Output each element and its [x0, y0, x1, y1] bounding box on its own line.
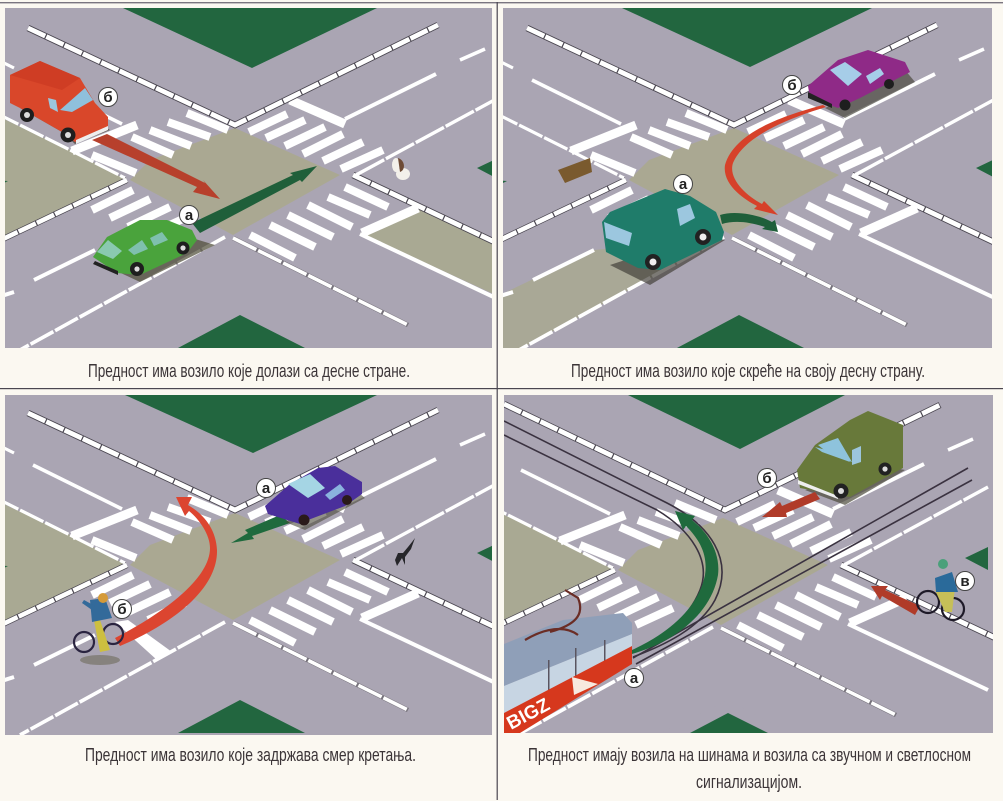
label б: б [762, 470, 772, 487]
label б: б [103, 89, 113, 106]
cat [395, 538, 415, 566]
intersection scene 1 [0, 0, 520, 350]
tram а [503, 590, 632, 734]
label а [256, 478, 276, 498]
olive van б [797, 411, 905, 505]
top rule [0, 2, 1003, 3]
panel 3: vehicle keeping direction [0, 390, 520, 765]
tram logo text: BIGZ [503, 694, 554, 734]
label а: а [630, 670, 639, 687]
dog [392, 158, 410, 180]
intersection scene 4 [504, 395, 993, 733]
cyclist в [917, 559, 964, 620]
label в: в [960, 573, 970, 590]
caption 4 [528, 745, 971, 792]
panel 4: rail vehicles and emergency vehicles [504, 395, 993, 792]
label а [624, 668, 644, 688]
centre vertical rule [497, 2, 498, 800]
label в [956, 572, 974, 590]
label а [674, 174, 692, 194]
hedge [558, 158, 592, 183]
green arrow [192, 166, 317, 233]
tram rails [504, 421, 972, 664]
red arrow [92, 134, 220, 199]
label б: б [787, 77, 797, 94]
red arrow в [871, 586, 920, 615]
green car а [93, 220, 215, 282]
caption 3: Предност има возило које задржава смер кретања. [85, 745, 416, 765]
label б [98, 88, 118, 106]
caption 1: Предност има возило које долази са десне стране. [88, 361, 410, 381]
label а: а [679, 176, 688, 193]
teal van а [602, 189, 725, 285]
red van б [10, 61, 110, 144]
panel 2: vehicle turning to its right [503, 8, 992, 381]
label б [758, 468, 776, 488]
label а [180, 206, 198, 224]
label а: а [185, 207, 194, 224]
centre horizontal rule [0, 388, 1003, 389]
label а: а [262, 480, 271, 497]
label б: б [117, 601, 127, 618]
caption 4: сигнализацијом. [696, 772, 802, 792]
label б [112, 600, 132, 618]
label б [782, 76, 802, 94]
white stop line under cyclist [115, 620, 172, 660]
intersection scene 3 [0, 390, 520, 740]
red turning arrow [725, 105, 826, 215]
cyclist б [74, 593, 123, 665]
green curved arrow [632, 511, 718, 654]
red arrow б [762, 492, 820, 517]
panel 1: vehicle coming from the right [0, 0, 520, 381]
red curved arrow [115, 497, 217, 646]
intersection scene 2 [503, 8, 992, 348]
purple car б [808, 50, 915, 118]
green turning arrow [720, 213, 778, 232]
blue car а [265, 466, 365, 530]
green arrow [231, 515, 290, 543]
